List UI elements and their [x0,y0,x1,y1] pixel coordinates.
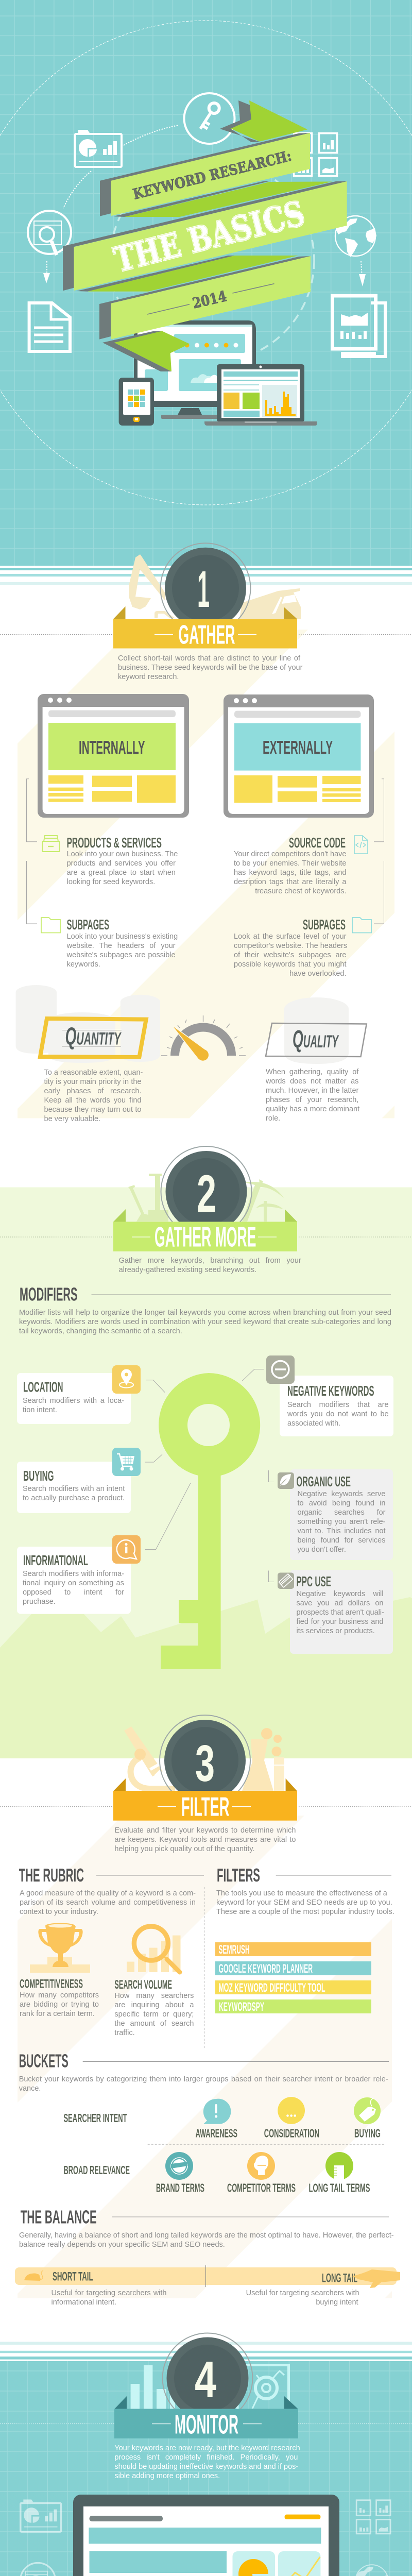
card: ppc use: prospects that aren't quali- [297,1608,384,1617]
badge: step 4: 4 [195,2351,216,2409]
icon: magnifier window [28,211,71,255]
badge: step 1: 1 [197,561,210,618]
heading: filters: FILTERS [217,1865,260,1886]
text: filters intro [216,1889,393,1918]
card: ppc use [278,1570,393,1654]
block: competitiveness: rank for a certain term. [20,2009,95,2018]
bucket: buying: BUYING [354,2127,381,2140]
section 1 diagonal background [18,630,394,1118]
badge: step 2 [161,1146,251,1237]
icon: folder [352,918,371,933]
divider: dotted line [0,634,412,635]
year 2014: 2014 [191,287,228,312]
card: buying: BUYING [23,1468,54,1484]
dotted connector arrows [43,125,366,286]
card: organic use [278,1469,393,1560]
block: search volume: specific term or query; [114,2010,194,2019]
card: negative keywords: words you do not want to be [287,1410,389,1418]
card: ppc use: save you ad dollars on [297,1599,383,1607]
banner: monitor: MONITOR [175,2410,238,2440]
bucket: competitor terms: COMPETITOR TERMS [227,2181,296,2195]
text: quantity: Keep all the words you find [44,1096,141,1105]
text: gather intro: business. These seed keywords will be the base of your [118,664,302,672]
block: subpages internal: SUBPAGES [67,917,109,933]
card: organic use: ORGANIC USE [297,1473,351,1489]
block: search volume [114,1978,194,2039]
text: short tail [52,2289,167,2308]
card: organic use: organic searches for [298,1509,385,1517]
text: quality: role. [266,1114,280,1123]
text: quality: words does not matter as [266,1077,358,1086]
title: keyword research: KEYWORD RESEARCH: [131,147,293,203]
bucket: buying [354,2097,381,2140]
icon: leaf [278,1472,294,1489]
label: quantity: QUANTITY [65,1023,122,1050]
block: search volume: How many searchers [114,1992,194,2000]
divider: dotted line [0,1806,412,1807]
text: modifiers intro: tail keywords, changing the semantic of a search. [19,1327,182,1335]
card: organic use: Negative keywords serve [298,1490,385,1498]
bucket: long tail terms [309,2152,370,2195]
card: informational: INFORMATIONAL [23,1552,88,1568]
icon: map pin [112,1365,141,1394]
text: gather intro: keyword research. [118,673,179,681]
block: products and services: are a great place to start when [67,869,176,877]
illustration: shovels and pickaxes [128,1174,284,1222]
text: gather more intro [119,1256,301,1276]
heading: the balance: THE BALANCE [21,2206,97,2227]
text: filter intro [114,1826,296,1855]
text: monitor intro [114,2444,298,2482]
section 4 background [0,2361,412,2576]
icon: globe [335,216,376,257]
illustration: bars and analytics frame [131,2365,288,2409]
card: location [17,1365,141,1424]
bucket: consideration: CONSIDERATION [264,2127,319,2140]
card: buying [17,1448,141,1513]
section 3 diagonal background [18,1816,392,2298]
icon: trophy [30,1923,90,1973]
banner: filter [113,1778,297,1822]
text: rubric intro [20,1889,196,1918]
text: rubric intro: context to your industry. [20,1908,98,1916]
text: quantity: tity is your main priority in the [44,1078,141,1086]
heading: buckets: BUCKETS [19,2050,68,2072]
chart: short vs long tail: SHORT TAIL [53,2270,93,2283]
text: buckets intro: Bucket your keywords by categorizing them into larger groups based on their searcher intent or broader rele- [19,2075,388,2083]
card: buying: to actually purchase a product. [23,1494,125,1502]
block: search volume: SEARCH VOLUME [114,1978,172,1992]
block: source code: Your direct competitors don't have [234,850,346,858]
text: monitor intro: process isn't completely finished. Periodically, you [114,2453,298,2462]
block: competitiveness: COMPETITIVENESS [20,1977,83,1991]
divider: dotted line [0,1236,412,1238]
text: buckets intro [19,2075,388,2094]
block: source code: treasure chest of keywords. [255,887,346,895]
text: quality: quality has a more dominant [266,1105,359,1113]
block: competitiveness: How many competitors [20,1991,99,1999]
label: searcher intent: SEARCHER INTENT [64,2111,127,2125]
icon: credit card [278,1572,294,1589]
list: filter tools [215,1942,371,2014]
card: informational: pruchase. [23,1598,56,1606]
block: subpages external: competitor's website. The headers [234,942,347,950]
text: filter intro: are keepers. Keyword tools and measures are vital to [114,1836,296,1844]
block: search volume: the amount of search [114,2020,194,2028]
banner: filter: FILTER [181,1792,229,1822]
text: gather more intro: Gather more keywords, branching out from your [119,1257,301,1265]
text: modifiers intro [19,1308,391,1336]
panel: externally window [224,694,374,818]
card: ppc use: PPC USE [297,1573,331,1589]
text: balance intro [19,2231,387,2250]
text: gather intro: Collect short-tail words that are distinct to your line of [118,654,300,663]
block: products and services: looking for seed keywords. [67,878,155,886]
icon: dashboard chart [75,130,122,167]
section 4 stripes [0,2342,412,2360]
block: subpages external: have overlooked. [289,970,346,978]
divider: vertical dashes [203,1887,204,2049]
block: products and services [42,835,176,888]
card: location: LOCATION [23,1379,63,1395]
section 1 stripes [0,566,412,585]
block: subpages internal [41,917,176,970]
text: modifiers intro: keywords. Modifiers are words used in combination with your seed keyword that create sub-categories and long [19,1318,391,1326]
icon: chart grid [294,133,337,176]
block: subpages external: Look at the surface level of your [234,933,346,941]
chart: short vs long tail [15,2265,400,2288]
block: competitiveness: are bidding or trying to [20,2000,99,2008]
card: negative keywords [266,1355,393,1436]
block: source code [234,835,368,897]
connectors [145,1369,274,1582]
icon: mouse [24,2270,43,2281]
text: filters intro: These are a couple of the most popular industry tools. [216,1908,394,1916]
card: organic use: to avoid being found in [298,1499,385,1507]
card: organic use: vant to. This includes not [298,1527,385,1535]
bucket: brand terms [156,2152,204,2195]
card: informational: Search modifiers with informa- [23,1570,124,1578]
hero panel [0,0,412,566]
block: products and services: PRODUCTS & SERVICES [67,835,162,851]
block: subpages external [234,917,371,979]
illustration: database silhouettes [16,985,349,1064]
banner: gather [113,606,297,650]
text: filter intro: Evaluate and filter your keywords to determine which [114,1826,296,1835]
block: products and services: Look into your own business. The [67,850,178,858]
icon: drawer [42,836,60,852]
badge: step 3 [160,1715,250,1806]
card: informational [17,1535,141,1614]
icon: document [29,302,70,351]
card: location: tion intent. [23,1405,57,1414]
icon: code file [354,836,368,854]
text: monitor intro: should be updating ineffective keywords and and if pos- [114,2463,298,2471]
text: filter intro: helping you pick quality out of the quantity. [114,1845,255,1853]
banner: gather more: GATHER MORE [154,1221,256,1253]
badge: step 2: 2 [197,1164,216,1223]
icon: minus circle [266,1355,295,1384]
text: rubric intro: A good measure of the quality of a keyword is a com- [20,1889,196,1897]
card: negative keywords: associated with. [287,1419,340,1428]
badge: step 1 [161,543,250,633]
title: the basics: THE BASICS [110,193,308,280]
illustration: excavator and truck [129,554,301,619]
icon: folder [41,918,60,933]
text: quantity: early phases of research. [44,1087,141,1095]
text: quality: much. However, in the latter [266,1087,358,1095]
banner: monitor [114,2396,298,2440]
text: quality: When gathering, quality of [266,1068,358,1076]
icon: desktop monitor [134,320,256,419]
text: quality [266,1067,358,1124]
label: quality: QUALITY [293,1026,339,1053]
text: quantity: because they may turn out to [44,1106,141,1114]
brackets [27,779,384,924]
block: source code: SOURCE CODE [289,835,346,851]
chart: gauge [161,1015,246,1061]
block: subpages internal: website's subpages are possible [67,951,176,959]
badge: step 3: 3 [195,1735,215,1792]
text: modifiers intro: Modifier lists will help to organize the longer tail keywords you come across when branching out from your seed [19,1309,391,1317]
card: organic use: something you aren't rele- [298,1518,385,1526]
year 2014 [147,284,274,314]
card: ppc use: Negative keywords will [297,1590,383,1598]
label: quantity [40,1019,146,1057]
heading: modifiers: MODIFIERS [20,1284,77,1304]
icon: report [333,296,385,357]
icon: info bubble [112,1535,141,1564]
label: broad relevance: BROAD RELEVANCE [64,2163,130,2177]
chart: short vs long tail: LONG TAIL [322,2272,357,2285]
banner: gather: GATHER [178,620,235,650]
icon: cart [112,1448,141,1476]
divider: dashes [148,2144,385,2145]
block: subpages internal: website. The headers of your [67,942,176,950]
block: source code: has keyword tags, title tags, and [234,869,346,877]
card: ppc use: fied for your business and [297,1618,383,1626]
illustration: microscope and flask [124,1726,285,1791]
icon: laptop with charts [204,364,317,426]
icon: key in circle [184,93,235,144]
text: quantity: To a reasonable extent, quan- [44,1069,143,1077]
heading: the rubric: THE RUBRIC [19,1865,84,1886]
panel: internally window: INTERNALLY [79,737,145,758]
block: competitiveness [20,1977,99,2020]
text: monitor intro: Your keywords are now ready, but the keyword research [114,2444,300,2452]
list: filter tools: SEMRUSH [218,1943,250,1957]
text: filters intro: keyword for your SEM and SEO needs are up to you. [216,1899,392,1907]
text: quality: phases of your research, [266,1096,358,1104]
block: subpages external: SUBPAGES [303,917,346,933]
icon: magnifier with bars [127,1926,180,1972]
charts [233,2551,320,2576]
bucket: consideration [264,2097,319,2140]
panel: externally window: EXTERNALLY [263,737,333,758]
block: subpages external: possible keywords that you might [234,960,346,969]
block: products and services: products and services you offer [67,859,176,868]
text: monitor intro: sible adding more optimal ones. [114,2472,220,2480]
card: ppc use: its services or products. [297,1627,375,1635]
icon: tablet [119,378,154,426]
card: buying: Search modifiers with an intent [23,1485,125,1493]
card: negative keywords: Search modifiers that are [287,1401,389,1409]
bucket: brand terms: BRAND TERMS [156,2181,204,2195]
text: buckets intro: vance. [19,2084,41,2093]
illustration: big monitor dashboard [73,2495,339,2576]
block: search volume: are inquiring about a [114,2001,194,2009]
text: long tail: Useful for targeting searchers with [246,2289,359,2297]
block: subpages external: of their website's subpages are [234,951,346,959]
card: location: Search modifiers with a loca- [23,1396,124,1404]
card: organic use: you don't offer. [298,1546,346,1554]
text: long tail [246,2289,358,2308]
label: quality [266,1023,367,1057]
text: short tail: Useful for targeting searchers with [52,2289,167,2297]
list: filter tools: GOOGLE KEYWORD PLANNER [218,1962,313,1976]
card: informational: opposed to intent for [23,1588,124,1597]
icon: long-tailed creature [352,2269,400,2288]
block: source code: desription tags that are literally a [234,878,346,886]
card: informational: tional inquiry on something as [23,1579,124,1587]
badge: step 4 [163,2333,252,2424]
text: balance intro: Generally, having a balance of short and long tailed keywords are the most optimal to have. However, the perfect- [19,2231,394,2240]
text: quantity [44,1068,141,1125]
block: source code: to be your enemies. Their website [234,859,346,868]
text: gather intro [118,654,300,683]
card: organic use: being found for services [298,1536,385,1545]
text: quantity: be very valuable. [44,1115,100,1123]
text: long tail: buying intent [316,2298,358,2307]
block: subpages internal: keywords. [67,960,100,969]
text: balance intro: balance really depends on your specific SEM and SEO needs. [19,2241,225,2249]
text: filters intro: The tools you use to measure the effectiveness of a [216,1889,387,1897]
panel: internally window [38,694,189,818]
bucket: awareness [196,2099,237,2140]
ribbon banner [63,100,347,371]
section 2 background [0,1187,412,1758]
block: search volume: traffic. [114,2029,135,2037]
bucket: competitor terms [227,2152,296,2195]
text: rubric intro: parison of its search volume and competitiveness in [20,1899,196,1907]
text: gather more intro: already-gathered existing seed keywords. [119,1266,256,1274]
block: subpages internal: Look into your business's existing [67,933,178,941]
list: filter tools: KEYWORDSPY [219,2000,264,2014]
title: the basics: THE BASICS [110,193,308,280]
divider: dotted line [0,2424,412,2425]
illustration: key [159,1373,260,1669]
pale side icons [21,2500,394,2576]
text: short tail: informational intent. [52,2298,116,2307]
bucket: awareness: AWARENESS [196,2127,237,2140]
banner: gather more [113,1209,297,1253]
